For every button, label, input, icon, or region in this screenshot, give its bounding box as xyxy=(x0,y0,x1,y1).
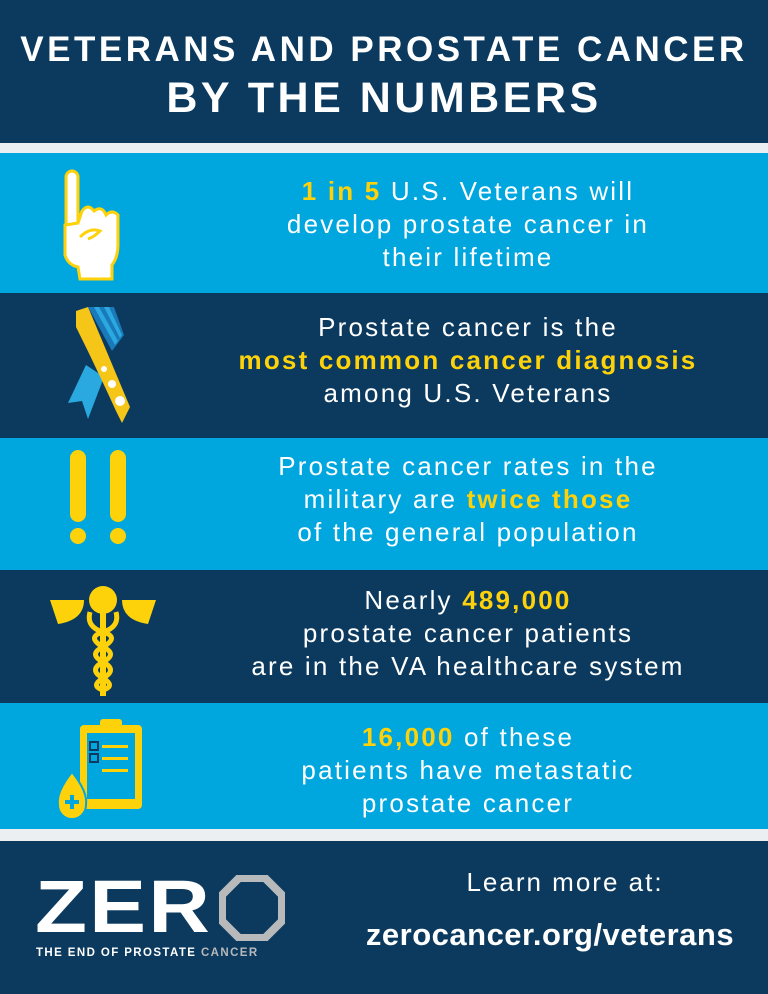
text xyxy=(287,176,649,272)
text: 16,000 of these xyxy=(362,722,574,752)
header xyxy=(0,0,768,143)
logo: ZERO: ZER xyxy=(35,865,212,948)
logo: ZERO: THE END OF PROSTATE CANCER xyxy=(36,947,259,959)
text xyxy=(278,451,658,547)
text: prostate cancer xyxy=(362,788,574,818)
text xyxy=(301,722,635,818)
text: 1 in 5 U.S. Veterans will xyxy=(302,176,634,206)
text: learn more: Learn more at: xyxy=(466,867,664,897)
title: VETERANS AND PROSTATE CANCER xyxy=(20,30,748,69)
text: military are twice those xyxy=(304,484,632,514)
text: patients have metastatic xyxy=(301,755,635,785)
icon: exclamation marks xyxy=(70,450,126,544)
text: among U.S. Veterans xyxy=(324,378,612,408)
icon: pointing hand xyxy=(64,170,120,280)
text xyxy=(239,312,697,408)
panel: twice xyxy=(0,438,768,570)
text: develop prostate cancer in xyxy=(287,209,649,239)
text: Nearly 489,000 xyxy=(364,585,572,615)
text: their lifetime xyxy=(383,242,553,272)
text: most common cancer diagnosis xyxy=(239,345,697,375)
icon: clipboard xyxy=(58,719,142,818)
icon: caduceus xyxy=(50,586,156,696)
text: url: zerocancer.org/veterans xyxy=(366,917,734,952)
title xyxy=(20,30,748,122)
text: are in the VA healthcare system xyxy=(251,651,685,681)
text: of the general population xyxy=(297,517,639,547)
text: prostate cancer patients xyxy=(303,618,633,648)
panel: most common xyxy=(0,293,768,438)
panel: 16,000 xyxy=(0,703,768,829)
icon: ribbon xyxy=(68,307,130,423)
panel: 1 in 5 xyxy=(0,153,768,293)
text xyxy=(251,585,685,681)
logo: ZERO xyxy=(35,865,285,959)
panel: 489,000 xyxy=(0,570,768,703)
title: BY THE NUMBERS xyxy=(166,74,602,122)
text: Prostate cancer is the xyxy=(318,312,618,342)
text: Prostate cancer rates in the xyxy=(278,451,658,481)
footer xyxy=(0,841,768,994)
